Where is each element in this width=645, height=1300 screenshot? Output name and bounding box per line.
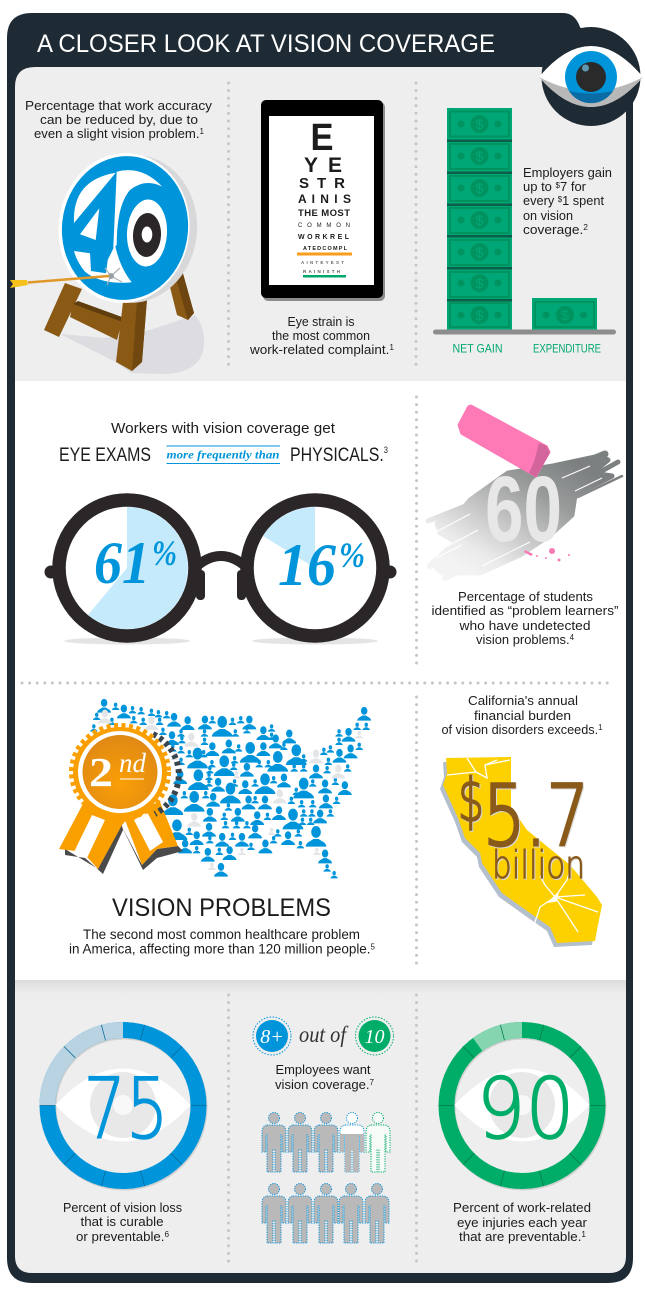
net gain stack of bills: $ [476, 244, 484, 260]
map: california [440, 757, 602, 947]
panel: problem learners [428, 405, 622, 647]
text: eye injuries: 1 [581, 1230, 587, 1239]
text: work accuracy: can be reduced by, due to [40, 112, 198, 127]
net gain stack of bills: $ [476, 307, 484, 323]
text: employers gain: every [523, 193, 555, 208]
icon: target with 40 [10, 147, 204, 374]
text: employers gain: coverage. [523, 222, 580, 237]
smudge with 60: 60 [485, 457, 562, 561]
text: vision loss: Percent of vision loss [63, 1200, 182, 1215]
tablet with eye chart: E [310, 117, 334, 159]
text: eye injuries: Percent of work-related [453, 1200, 591, 1215]
heading: eye exams: EYE EXAMS [59, 445, 151, 466]
heading: workers with vision coverage: Workers with vision coverage get [111, 421, 335, 437]
text: problem learners: 4 [570, 633, 575, 642]
badge: 8+: 8+ [260, 1026, 284, 1048]
tablet with eye chart: WORKREL [298, 234, 350, 241]
figure: $5.7 billion [458, 766, 589, 887]
tablet with eye chart: A I N I S [298, 192, 351, 206]
pictogram: ten people [262, 1112, 390, 1243]
net gain stack of bills: $ [476, 212, 484, 228]
ribbon badge: 2nd [59, 726, 183, 874]
panel: eye injuries 90 [438, 1025, 606, 1244]
text: eye injuries: eye injuries each year [457, 1215, 588, 1230]
label: net gain: NET GAIN [452, 342, 502, 356]
panel: employer money [433, 108, 616, 356]
text: employees want [275, 1062, 375, 1092]
text: problem learners: identified as “problem learners” [432, 603, 618, 618]
panel: california [440, 693, 603, 947]
expenditure bill: $ [561, 307, 569, 323]
shelf [433, 330, 616, 334]
net gain stack of bills: $ [476, 180, 484, 196]
smudge with 60 [428, 454, 622, 578]
text: second most common: 5 [371, 942, 376, 952]
text: employers gain: $ [558, 195, 563, 204]
text: second most common: The second most common healthcare problem [83, 927, 360, 942]
text: employers gain: 7 for [560, 179, 587, 194]
text: work accuracy: Percentage that work accuracy [25, 98, 213, 113]
text: out of: out of [299, 1022, 349, 1047]
panel: work accuracy [10, 98, 213, 374]
tablet with eye chart: ATEDCOMPL [303, 246, 348, 252]
text: california burden: financial burden [474, 708, 571, 723]
tablet with eye chart: S T R [299, 175, 345, 192]
text: eye strain: 1 [389, 343, 395, 352]
text: employers gain: 2 [583, 223, 589, 232]
label: expenditure: EXPENDITURE [533, 342, 601, 356]
tablet with eye chart [261, 100, 385, 301]
net gain stack of bills: $ [476, 275, 484, 291]
expenditure bill [532, 298, 597, 330]
panel: vision problems [59, 699, 376, 956]
text: employers gain [523, 165, 612, 237]
heading: physicals: PHYSICALS. [290, 445, 402, 466]
text: problem learners: Percentage of students [458, 589, 594, 604]
text: problem learners [432, 589, 618, 647]
text: problem learners: who have undetected [458, 618, 590, 633]
text: eye strain: Eye strain is [288, 314, 355, 329]
text: work accuracy [25, 98, 213, 141]
ribbon badge: 2nd: nd [119, 748, 146, 778]
text: employees want: 7 [370, 1078, 375, 1087]
tablet with eye chart: RAINISTH [303, 269, 340, 274]
text: california burden: 1 [598, 723, 603, 732]
text: eye strain [249, 314, 395, 357]
panel: employees want coverage [253, 1017, 394, 1243]
text: employers gain: up to [523, 179, 552, 194]
panel edge shading [15, 980, 626, 994]
text: employees want: Employees want [276, 1062, 371, 1077]
ring chart: 90 percent: 90 [476, 1060, 574, 1158]
glasses chart: % [339, 535, 365, 575]
callout: more frequently than [166, 446, 280, 464]
text: employers gain: Employers gain [523, 165, 612, 180]
panel: eye exams [44, 421, 396, 644]
text: vision loss [63, 1200, 182, 1244]
text: eye strain: the most common [272, 328, 370, 343]
text: employers gain: on vision [523, 208, 573, 223]
US map of people [90, 699, 371, 878]
text: work accuracy: 1 [200, 127, 205, 136]
net gain stack of bills: $ [476, 116, 484, 132]
text: eye injuries: that are preventable. [459, 1229, 578, 1244]
text: california burden: of vision disorders exceeds. [442, 722, 602, 737]
text: second most common: in America, affecting more than 120 million people. [69, 942, 371, 956]
tablet with eye chart: COMMON [298, 223, 350, 229]
ring chart: 90 percent [438, 1025, 606, 1186]
glasses chart: % [152, 533, 177, 573]
badge: 10 [356, 1017, 394, 1055]
figure: $5.7 billion: $ [458, 766, 484, 836]
text: eye strain: work-related complaint. [250, 342, 384, 357]
figure: $5.7 billion: billion [492, 843, 585, 887]
text: employers gain: $ [556, 181, 561, 190]
glasses chart: 61 [94, 530, 150, 596]
heading: vision problems: VISION PROBLEMS [112, 894, 331, 922]
title: A CLOSER LOOK AT VISION COVERAGE [37, 30, 495, 58]
badge: 10: 10 [364, 1026, 384, 1048]
panel: white middle section [15, 381, 626, 980]
text: work accuracy: even a slight vision problem. [34, 126, 198, 141]
text: california burden: California's annual [468, 693, 578, 708]
badge: 8+ [253, 1017, 291, 1055]
text: vision loss: or preventable. [76, 1229, 163, 1244]
text: problem learners: vision problems. [476, 632, 570, 647]
text: employers gain: 1 spent [562, 193, 604, 208]
figure: $5.7 billion: 5.7 [483, 767, 589, 865]
panel: vision loss 75 [40, 1025, 206, 1244]
glasses chart: 16 [278, 532, 336, 598]
glasses chart [44, 500, 396, 644]
tablet with eye chart: AINTEYEST [301, 260, 344, 265]
text: vision loss: 6 [164, 1230, 170, 1239]
heading: physicals: 3 [384, 445, 388, 455]
icon: pink eraser [458, 405, 550, 477]
text: employees want: vision coverage. [275, 1077, 369, 1092]
panel: eye strain tablet [249, 100, 395, 357]
tablet with eye chart: Y E [304, 154, 342, 177]
icon: eye [539, 27, 643, 126]
callout: more frequently than: more frequently than [166, 450, 280, 462]
tablet with eye chart: THE MOST [298, 208, 350, 219]
text: eye injuries [453, 1200, 591, 1244]
net gain stack of bills: $ [476, 148, 484, 164]
text: california burden [442, 693, 603, 737]
ring chart: 75 percent [40, 1025, 206, 1186]
net gain stack of bills [447, 108, 512, 330]
text: vision loss: that is curable [80, 1214, 164, 1229]
ribbon badge: 2nd: 2 [89, 749, 113, 795]
ring chart: 75 percent: 75 [84, 1060, 168, 1158]
text: second most common [69, 927, 376, 956]
